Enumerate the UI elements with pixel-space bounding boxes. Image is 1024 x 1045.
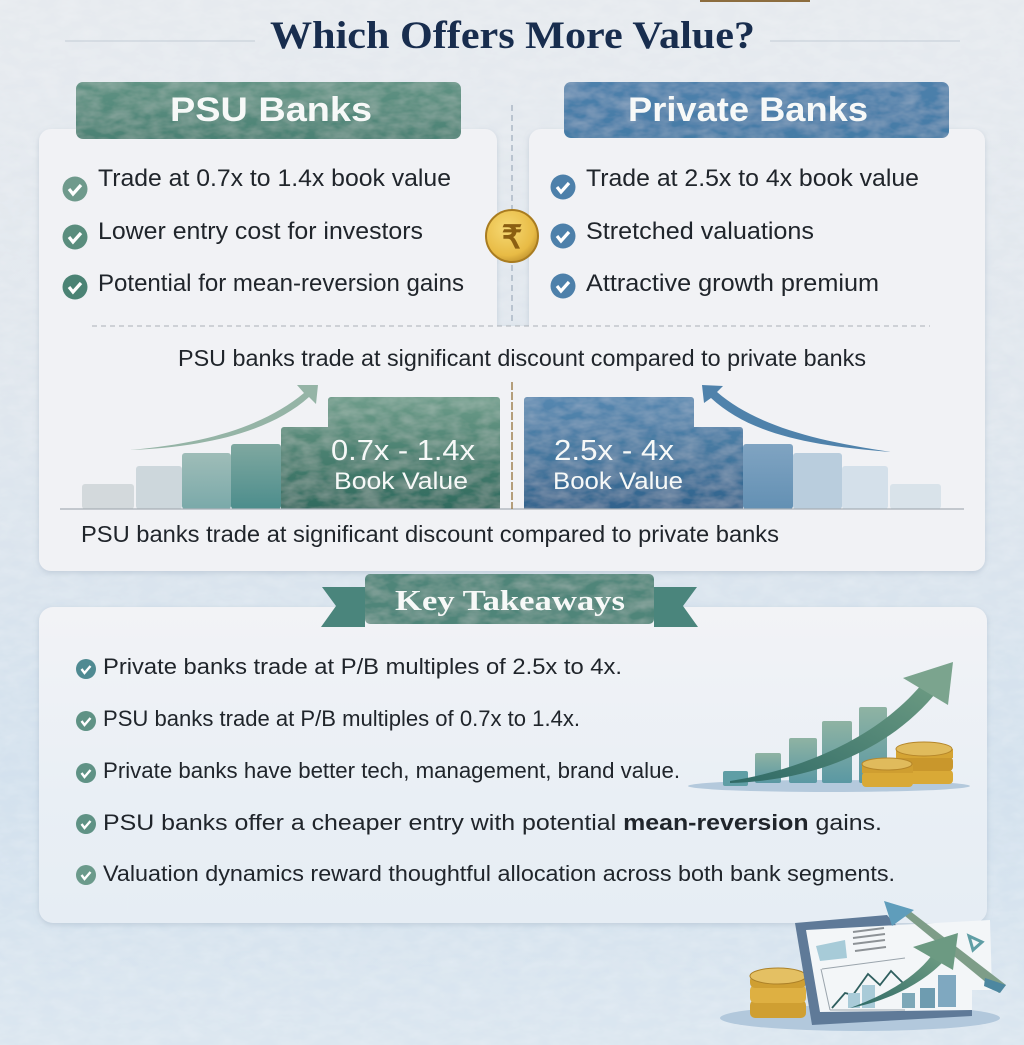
chart divider	[511, 382, 513, 509]
tablet	[795, 915, 972, 1025]
PSU bullet list: Trade at 0.7x to 1.4x book value	[98, 165, 451, 192]
thumbnail	[816, 940, 847, 961]
centre divider	[511, 105, 513, 322]
panel header: PSU Banks	[76, 82, 461, 139]
top edge ornament	[700, 0, 810, 2]
takeaways list: PSU banks offer a cheaper entry with potential mean-reversion gains.	[103, 810, 882, 835]
takeaways list: PSU banks trade at P/B multiples of 0.7x to 1.4x.	[103, 706, 580, 731]
chart: Private book value steps: Book Value	[553, 468, 683, 495]
takeaways list: Private banks have better tech, management, brand value.	[103, 758, 680, 783]
arrow: Private trend	[702, 385, 892, 452]
PSU bullet list: Lower entry cost for investors	[98, 218, 423, 245]
caption: top: PSU banks trade at significant discount compared to private banks	[178, 345, 866, 371]
play icon	[969, 936, 982, 950]
takeaways list	[76, 654, 895, 886]
banner: key takeaways: Key Takeaways	[395, 585, 625, 617]
illustration: growth chart with coins	[688, 662, 970, 792]
chart: Private book value steps	[524, 385, 941, 509]
takeaways list: Valuation dynamics reward thoughtful allocation across both bank segments.	[103, 861, 895, 886]
arrow: PSU trend	[130, 385, 318, 450]
arrow: green	[850, 955, 942, 1008]
PSU bullet list	[62, 165, 464, 300]
panel header: Private Banks: Private Banks	[628, 91, 868, 129]
Private bullet list: Trade at 2.5x to 4x book value	[586, 165, 919, 192]
banner: key takeaways	[321, 574, 698, 627]
chart baseline	[60, 508, 964, 510]
Private bullet list: Stretched valuations	[586, 218, 814, 245]
panel header: Private Banks	[564, 82, 949, 138]
chart: PSU book value steps: 0.7x - 1.4x	[331, 435, 476, 467]
panel: comparison	[39, 82, 985, 571]
title: Which Offers More Value?	[270, 14, 755, 57]
chart: Private book value steps: 2.5x - 4x	[554, 435, 675, 467]
takeaways list: Private banks trade at P/B multiples of 2.5x to 4x.	[103, 654, 622, 679]
coin stack	[750, 968, 806, 1018]
section divider	[92, 325, 930, 327]
chart: PSU book value steps	[82, 385, 500, 509]
icon: rupee coin: ₹	[502, 218, 522, 256]
arrow: blue	[905, 911, 1006, 993]
illustration: tablet dashboard with arrows and coins	[720, 901, 1006, 1031]
PSU bullet list: Potential for mean-reversion gains	[98, 270, 464, 297]
chart: PSU book value steps: Book Value	[334, 468, 468, 495]
Private bullet list: Attractive growth premium	[586, 270, 879, 297]
panel: key takeaways	[39, 607, 987, 923]
icon: rupee coin	[486, 210, 538, 262]
line chart	[821, 958, 905, 1010]
caption: bottom: PSU banks trade at significant discount compared to private banks	[81, 521, 779, 547]
Private bullet list	[550, 165, 919, 298]
panel header: PSU Banks: PSU Banks	[170, 91, 372, 129]
